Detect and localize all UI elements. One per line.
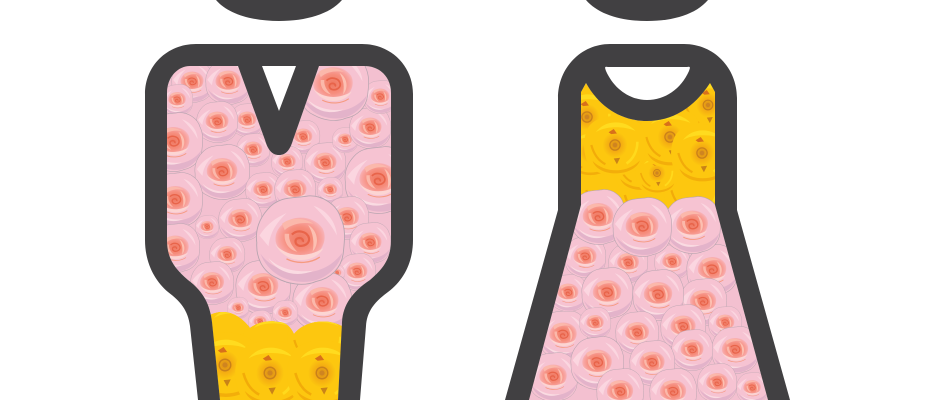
figure: man (144, 0, 413, 400)
icon: man head (216, 0, 342, 21)
figure: woman (505, 0, 790, 400)
woman skirt rose fill (520, 190, 775, 400)
man trousers yellow rose fill (210, 312, 342, 400)
woman bodice yellow rose fill (581, 83, 715, 209)
man suit rose fill (167, 66, 391, 334)
icon: woman head (586, 0, 708, 21)
infographic: rose-filled man and woman restroom figures (144, 0, 790, 400)
icon: man outline and collar (145, 44, 413, 400)
icon: woman outline and neckline (505, 44, 790, 400)
